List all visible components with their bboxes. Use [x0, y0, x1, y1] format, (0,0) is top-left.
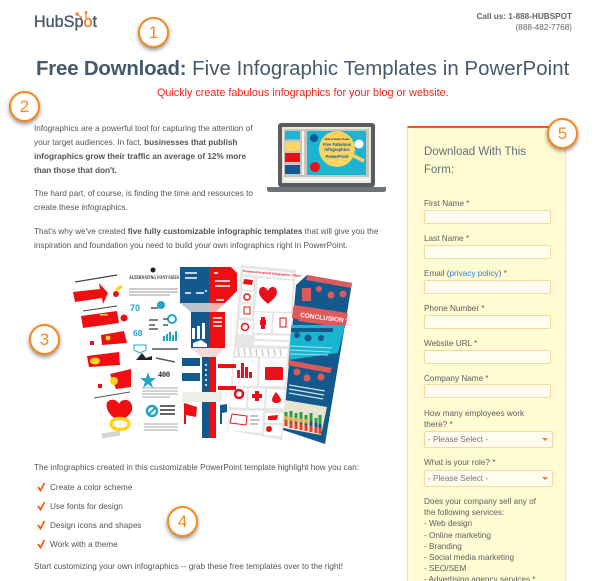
check item 4: Work with a theme [50, 540, 118, 549]
label: email: Email (privacy policy) * [424, 269, 507, 278]
infographic templates collage [73, 265, 352, 444]
input: email [424, 280, 551, 294]
icon: laptop with infographic: Infographics [324, 147, 350, 152]
check item 3: Design icons and shapes [50, 521, 142, 530]
form heading: Download With This [424, 146, 526, 158]
callout 1: 1 [149, 23, 158, 42]
label: employees [424, 409, 524, 429]
select: employees [424, 431, 553, 448]
subtitle: Quickly create fabulous infographics for your blog or website. [157, 87, 449, 99]
paragraph: customizable template: The infographics created in this customizable PowerPoint template highlight how you can: [34, 463, 359, 472]
label: services question: Does your company sell any of [424, 497, 536, 506]
intro paragraph: Infographics are a powerful tool for capturing the attention of [34, 124, 252, 133]
template 4: pinterest style [227, 265, 301, 440]
input: last name [424, 245, 551, 259]
label: role: What is your role? * [424, 458, 495, 467]
callout 5: 5 [558, 124, 567, 143]
input: website [424, 350, 551, 364]
call us contact: (888-482-7768) [516, 23, 572, 32]
input: phone [424, 315, 551, 329]
intro paragraph [34, 124, 253, 175]
callout 4 [167, 506, 198, 537]
icon: laptop with infographic: Five Fabulous [323, 142, 352, 147]
template 5: conclusion: CONCLUSION [300, 312, 344, 324]
intro paragraph: your target audiences. In fact, businesses that publish [34, 138, 237, 147]
label: phone: Phone Number * [424, 304, 485, 313]
label: employees: there? * [424, 420, 453, 429]
template 2: font sizes: 70 [130, 303, 140, 313]
intro paragraph: than those that don't. [34, 166, 117, 175]
callout 5 [547, 118, 578, 149]
template 2: font sizes: 400 [158, 370, 170, 379]
logo: HubSpot: HubSpot [34, 13, 97, 31]
label: services question [424, 497, 536, 581]
label: services question: - SEO/SEM [424, 564, 466, 573]
callout 3: 3 [40, 330, 49, 349]
label: services question: - Social media marketing [424, 553, 514, 562]
select: role [424, 470, 553, 487]
callout 4: 4 [178, 512, 187, 531]
template 2: font sizes: ALTERNATING FONT SIZES [129, 276, 179, 281]
select: employees: - Please Select - [428, 435, 488, 444]
checklist [37, 482, 142, 549]
template 3: red and blue [180, 267, 237, 438]
call us contact [476, 12, 572, 32]
select: role: - Please Select - [428, 474, 488, 483]
template 2: font sizes [128, 267, 182, 432]
template 1: color scheme [73, 275, 132, 436]
label: last name: Last Name * [424, 234, 469, 243]
template 2: font sizes: 68 [133, 328, 143, 338]
closing line: Start customizing your own infographics -- grab these free templates over to the right! [34, 562, 343, 571]
paragraph: templates offer: That's why we've created five fully customizable infographic templates that will give you the [34, 227, 378, 236]
icon: laptop with infographic: How to Easily Create [325, 138, 350, 141]
check item 2: Use fonts for design [50, 502, 123, 511]
icon: laptop with infographic: PowerPoint [325, 154, 349, 159]
callout 2 [9, 91, 40, 122]
label: first name: First Name * [424, 199, 470, 208]
paragraph: hard part: The hard part, of course, is finding the time and resources to [34, 189, 253, 198]
input: first name [424, 210, 551, 224]
paragraph: templates offer: inspiration and foundation you need to build your own infographics right in PowerPoint. [34, 241, 348, 250]
form heading: Form: [424, 164, 454, 176]
template 4: pinterest style: Pinterest-Inspired Infographic: Titan! [243, 269, 301, 278]
paragraph: templates offer [34, 227, 378, 250]
paragraph: hard part [34, 189, 253, 212]
label: company: Company Name * [424, 374, 489, 383]
label: employees: How many employees work [424, 409, 524, 418]
paragraph: hard part: create these infographics. [34, 203, 128, 212]
panel: download form [407, 126, 566, 581]
title: Free Download: Five Infographic Templates in PowerPoint [36, 58, 569, 80]
label: services question: the following services: [424, 508, 504, 517]
icon: laptop with infographic [267, 123, 386, 192]
template 5: conclusion [283, 275, 352, 444]
label: website: Website URL * [424, 339, 477, 348]
input: company [424, 384, 551, 398]
label: services question: - Online marketing [424, 531, 491, 540]
intro paragraph: infographics grow their traffic an average of 12% more [34, 152, 246, 161]
label: services question: - Web design [424, 519, 472, 528]
form heading [424, 146, 526, 176]
label: services question: - Branding [424, 542, 462, 551]
call us contact: Call us: 1-888-HUBSPOT [476, 12, 572, 21]
check item 1: Create a color scheme [50, 483, 132, 492]
callout 2: 2 [20, 97, 29, 116]
callout 1 [138, 17, 169, 48]
callout 3 [29, 324, 60, 355]
